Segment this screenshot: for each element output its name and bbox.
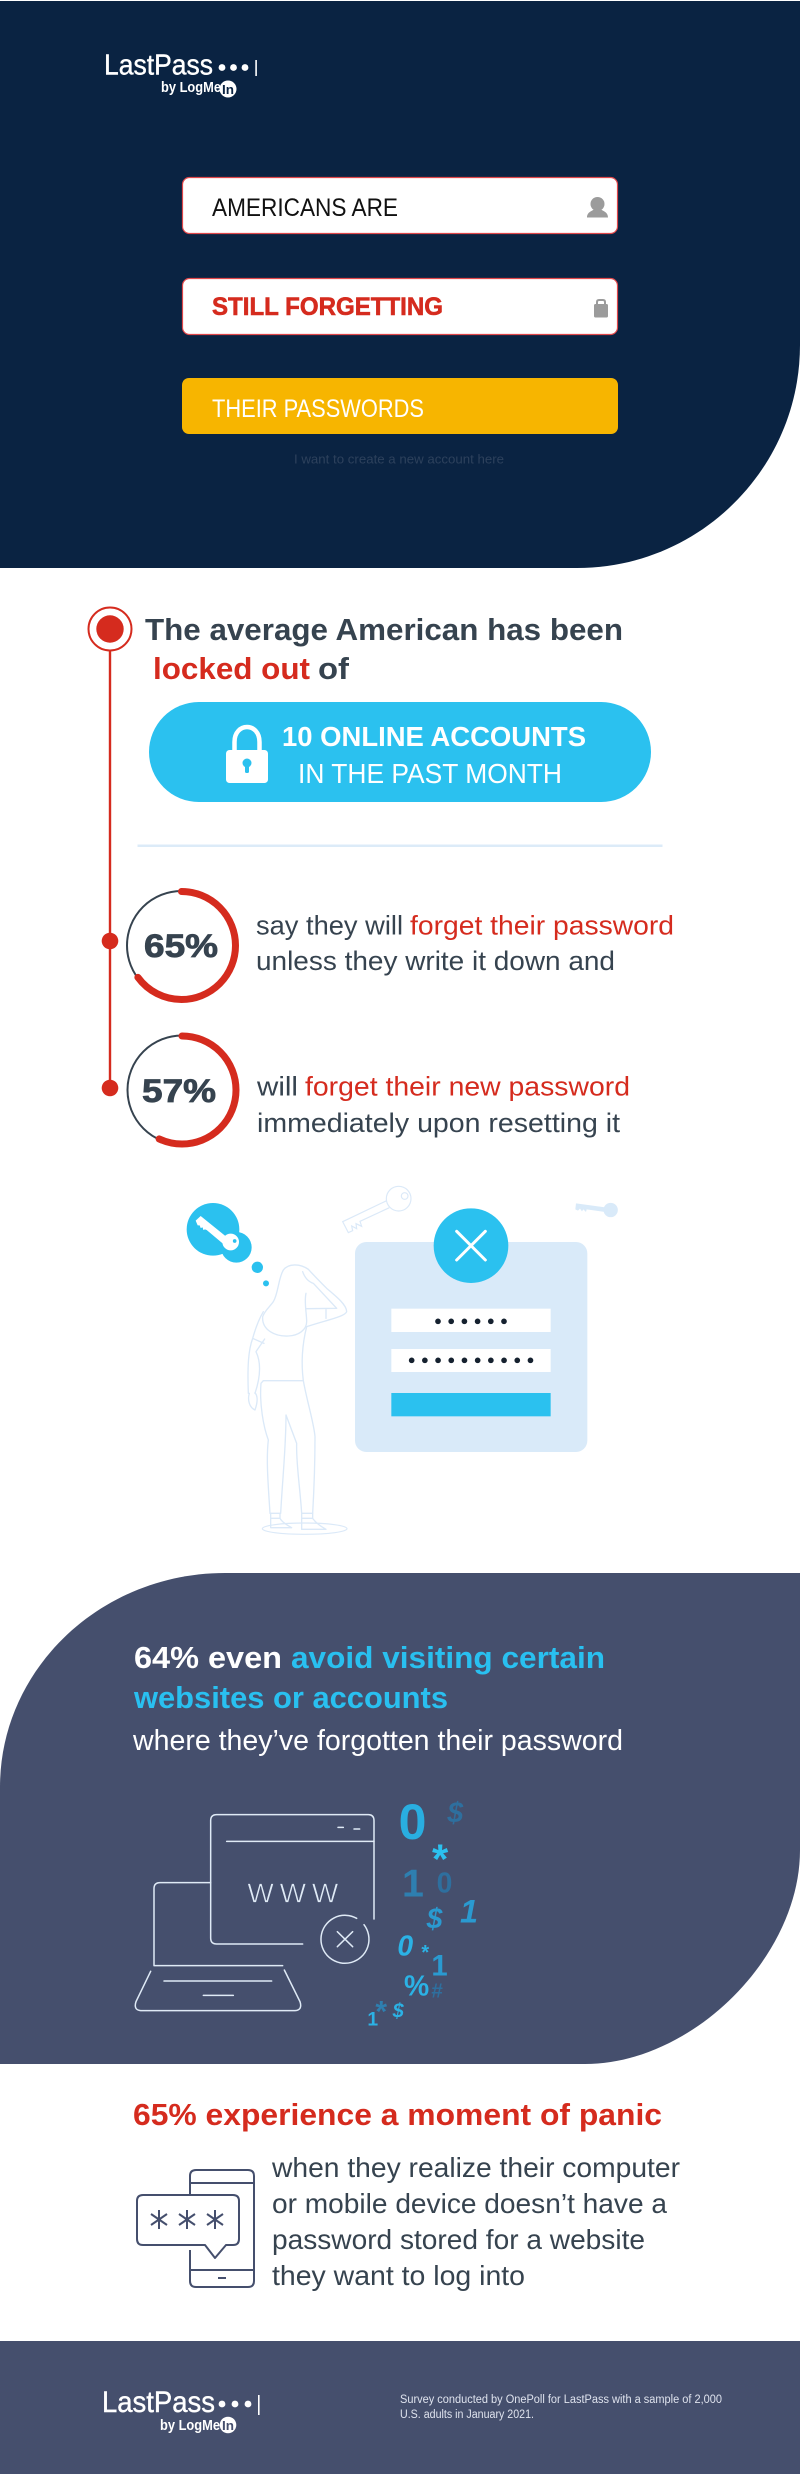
stat ring: 65% xyxy=(127,891,236,1000)
text: when they realize xyxy=(271,2152,680,2291)
heading: locked out xyxy=(145,612,623,686)
callout: 10 online accounts pill xyxy=(149,702,651,802)
panel: hero background xyxy=(0,1,800,568)
stat text: forget new password xyxy=(256,1072,630,1138)
icon: phone with password bubble xyxy=(137,2170,254,2287)
falling characters: 1 xyxy=(402,1862,424,1906)
text: when they realize: when they realize their computer xyxy=(271,2152,680,2183)
heading: avoid visiting: websites or accounts xyxy=(133,1680,448,1715)
logo: LastPass header: LastPass xyxy=(104,50,213,82)
callout: 10 online accounts pill: IN THE PAST MONTH xyxy=(298,758,562,789)
heading: avoid visiting: 64% even xyxy=(134,1640,282,1675)
text: survey source: U.S. adults in January 2021. xyxy=(400,2409,534,2421)
heading: locked out: locked out xyxy=(153,651,310,686)
falling characters: * xyxy=(432,1835,449,1882)
logo: LastPass footer: In xyxy=(222,2418,234,2433)
falling characters xyxy=(367,1794,478,2030)
panel: login form xyxy=(355,1208,587,1452)
stat text: forget their password: unless they write it down and xyxy=(256,946,615,976)
form field: still forgetting xyxy=(182,278,618,334)
www label: WWW xyxy=(247,1877,339,1908)
stat text: forget their password xyxy=(256,910,674,976)
heading: avoid visiting xyxy=(133,1640,605,1715)
stat ring: 65%: 65% xyxy=(144,928,218,964)
text: when they realize: they want to log into xyxy=(272,2260,525,2291)
stat text: forget new password: forget their new password xyxy=(305,1072,630,1102)
falling characters: 0 xyxy=(397,1931,413,1963)
stat ring: 57%: 57% xyxy=(142,1073,216,1109)
falling characters: 0 xyxy=(399,1794,426,1850)
button: their passwords: THEIR PASSWORDS xyxy=(212,395,424,423)
logo: LastPass header: by LogMe xyxy=(161,79,221,96)
stat text: forget their password: say they will xyxy=(256,910,403,940)
illustration: woman and login panel xyxy=(187,1186,618,1534)
thought bubble with key xyxy=(187,1203,269,1286)
illustration: laptop, browser and characters xyxy=(135,1794,478,2030)
text: survey source: Survey conducted by OnePoll for LastPass with a sample of 2,000 xyxy=(400,2394,722,2406)
timeline xyxy=(88,608,132,1096)
heading: locked out: of xyxy=(318,651,350,686)
icon: laptop and browser window xyxy=(135,1815,374,2011)
icon: lock xyxy=(226,727,268,783)
figure: woman xyxy=(248,1265,347,1534)
form field: Americans are xyxy=(182,178,618,234)
text: when they realize: or mobile device doesn’t have a xyxy=(272,2188,667,2219)
text: survey source xyxy=(400,2394,722,2421)
falling characters: % xyxy=(404,1970,429,2002)
heading: locked out: The average American has been xyxy=(145,612,623,647)
stat text: forget new password: immediately upon resetting it xyxy=(257,1108,621,1138)
falling characters: 0 xyxy=(437,1868,452,1900)
form field: still forgetting: STILL FORGETTING xyxy=(212,293,443,321)
stat text: forget their password: forget their password xyxy=(410,910,674,940)
falling characters: $ xyxy=(426,1903,443,1935)
icon: small key xyxy=(575,1203,618,1217)
logo: LastPass header: In xyxy=(222,82,234,97)
falling characters: $ xyxy=(446,1798,463,1830)
link text: create a new account: I want to create a new account here xyxy=(294,452,504,466)
icon: ghost key xyxy=(343,1186,411,1233)
text: when they realize: password stored for a website xyxy=(272,2224,645,2255)
falling characters: 1 xyxy=(367,2009,378,2030)
form field: Americans are: AMERICANS ARE xyxy=(212,194,398,222)
text: where they've forgotten: where they’ve forgotten their password xyxy=(132,1725,623,1757)
logo: LastPass footer: by LogMe xyxy=(160,2417,220,2434)
logo: LastPass footer: LastPass xyxy=(102,2386,215,2419)
stat ring: 57% xyxy=(128,1036,236,1144)
panel: avoid websites background xyxy=(0,1573,800,2064)
heading: avoid visiting: avoid visiting certain xyxy=(291,1640,605,1675)
panel: footer background xyxy=(0,2341,800,2474)
button: their passwords xyxy=(182,378,618,434)
logo: LastPass footer xyxy=(102,2386,260,2434)
icon: user xyxy=(587,197,608,218)
falling characters: 1 xyxy=(431,1950,448,1983)
falling characters: # xyxy=(431,1979,443,2002)
callout: 10 online accounts pill: 10 ONLINE ACCOUNTS xyxy=(282,721,586,752)
falling characters: $ xyxy=(392,2000,405,2022)
logo: LastPass header xyxy=(104,50,257,98)
falling characters: 1 xyxy=(460,1893,478,1929)
icon: padlock xyxy=(594,300,608,318)
falling characters: * xyxy=(421,1942,429,1964)
falling characters: * xyxy=(375,1996,387,2029)
heading: moment of panic: 65% experience a moment of panic xyxy=(133,2097,662,2132)
stat text: forget new password: will xyxy=(256,1072,298,1102)
